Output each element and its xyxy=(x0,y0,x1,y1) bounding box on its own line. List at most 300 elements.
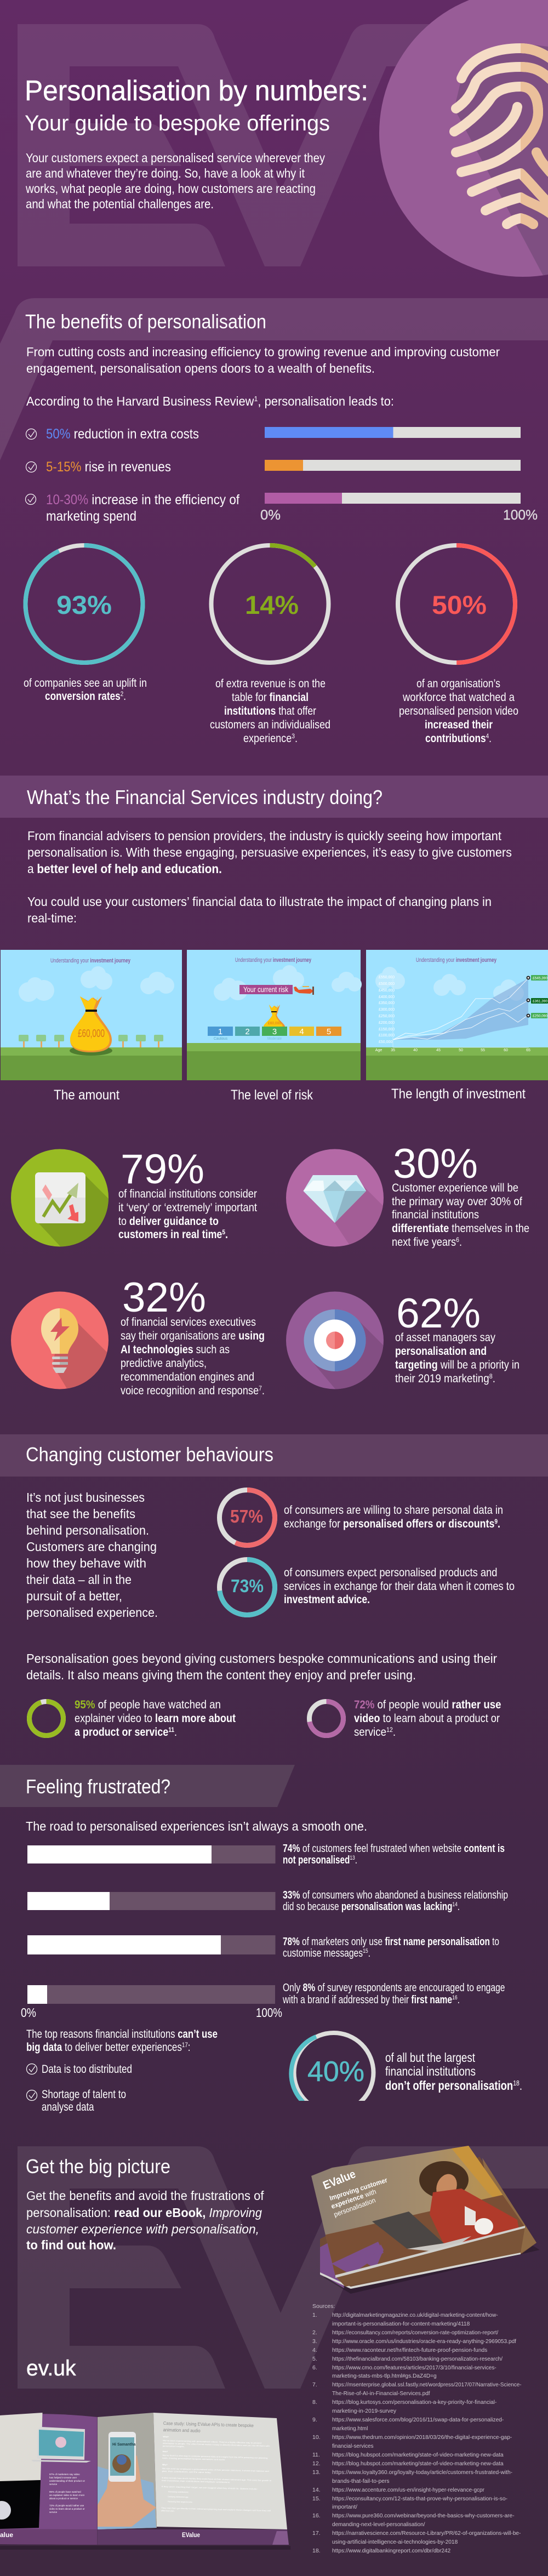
stat: 30%: . xyxy=(459,1236,462,1249)
ebook cover mock-up: Improving customer xyxy=(329,2176,389,2202)
bar labels: . xyxy=(458,1901,460,1913)
left page: alue xyxy=(0,2531,13,2539)
stat: 30%: differentiate themselves in the xyxy=(392,1222,529,1235)
intro text: From cutting costs and increasing efficiency to growing revenue and improving customer xyxy=(26,345,500,359)
stat ring: 73% xyxy=(219,1560,275,1615)
intro text: pursuit of a better, xyxy=(26,1589,122,1603)
text: 40%: . xyxy=(520,2078,522,2093)
text: 72%: 12 xyxy=(386,1726,393,1734)
text: 40% xyxy=(385,2050,522,2093)
stat: 32%: predictive analytics, xyxy=(121,1357,207,1370)
text: 40%: don’t offer personalisation xyxy=(385,2078,513,2093)
sources: https://www.salesforce.com/blog/2016/11/swap-data-for-personalized- xyxy=(332,2417,504,2423)
intro text: The road to personalised experiences isn’t always a smooth one. xyxy=(26,1819,367,1833)
top reasons: The top reasons financial institutions can’t use xyxy=(26,2028,218,2041)
stat: 79%: it ‘very’ or ‘extremely’ important xyxy=(118,1201,257,1214)
intro text: personalisation is. With these engaging, persuasive experiences, it’s easy to give customers xyxy=(27,845,512,859)
top reasons xyxy=(26,2028,218,2113)
illustration captions xyxy=(54,1086,526,1103)
sources: https://thefinancialbrand.com/58103/banking-personalization-research/ xyxy=(332,2356,503,2362)
icon: check xyxy=(26,429,36,440)
right page: Delaying retirement age xyxy=(168,2495,189,2498)
heading: Changing customer behaviours xyxy=(26,1443,273,1466)
gauge: 40% xyxy=(291,2033,374,2112)
illustration: the amount: £60,000 xyxy=(78,1028,105,1040)
illustration: the length of investment xyxy=(366,950,548,1080)
text: 95%: explainer video to learn more about xyxy=(75,1712,236,1725)
caption: 14%: institutions that offer xyxy=(224,705,316,717)
ebook cover mock-up: EValue xyxy=(321,2168,357,2192)
benefit 2: 5-15% rise in revenues xyxy=(46,459,171,475)
illustration: the length of investment: 35 xyxy=(391,1048,395,1052)
text: 57%: exchange for personalised offers or discounts xyxy=(284,1518,522,1530)
call to action text: customer experience with personalisation, xyxy=(26,2222,259,2236)
caption: 14%: of extra revenue is on the xyxy=(215,677,326,690)
illustration: the level of risk: Cautious xyxy=(214,1037,227,1041)
panel: get the big picture xyxy=(0,2143,548,2554)
text: 95%: a product or service xyxy=(75,1726,168,1739)
stat: 30%: Customer experience will be xyxy=(392,1182,518,1194)
benefit 1: 50% reduction in extra costs xyxy=(46,426,199,442)
left page: video to learn about a product or xyxy=(49,2507,85,2510)
stat: 62%: 62% xyxy=(396,1290,481,1337)
panel: feeling frustrated xyxy=(0,1765,522,2113)
illustration: the length of investment: £545,390 xyxy=(533,977,547,980)
stat: 32%: voice recognition and response xyxy=(121,1384,280,1397)
sources: The-Rise-of-AI-in-Financial-Services.pdf xyxy=(332,2390,430,2397)
stat: 30%: the primary way over 30% of xyxy=(392,1195,522,1208)
illustration: the length of investment: Age xyxy=(375,1048,382,1052)
bar labels: 15 xyxy=(363,1948,368,1954)
stat ring: 93% xyxy=(25,545,142,663)
stat ring: 14% xyxy=(212,545,329,663)
intro text: a better level of help and education. xyxy=(27,862,222,876)
illustration: the level of risk: Your current risk xyxy=(243,985,289,994)
illustration: the level of risk: 1 xyxy=(218,1027,222,1036)
illustration: the level of risk: 5 xyxy=(327,1027,331,1036)
illustration: the level of risk xyxy=(187,950,362,1080)
caption: 93%: conversion rates xyxy=(45,690,121,703)
sources: demanding-next-level-personalisation/ xyxy=(332,2521,425,2528)
right page: their investment, their contributions and employer contributions. xyxy=(162,2480,230,2483)
sources: 2. xyxy=(312,2329,317,2336)
stat: 62% xyxy=(286,1290,520,1398)
top reasons: Shortage of talent to xyxy=(42,2088,126,2101)
caption: 14%: table for financial xyxy=(232,691,309,704)
illustration: the length of investment: £361,390 xyxy=(533,1000,547,1003)
intro text xyxy=(27,829,512,925)
website address: ev.uk xyxy=(26,2356,77,2380)
right page: We’ve been experimenting with personalised videos. They’re a highly effective way to present xyxy=(163,2440,261,2444)
stat: 79%: of financial institutions consider xyxy=(118,1188,257,1200)
left page xyxy=(0,2413,98,2545)
stat: 30% xyxy=(286,1149,529,1249)
illustration: the amount: Understanding your investment journey xyxy=(50,958,131,964)
right page: tools, creating personalised bespoke animations and audio. xyxy=(162,2457,225,2461)
text: 73%: services in exchange for their data when it comes to xyxy=(284,1580,515,1593)
bar labels xyxy=(282,1843,508,2006)
illustration captions: The amount xyxy=(54,1087,119,1103)
left page: 72% of people would rather use xyxy=(49,2504,84,2507)
text: 57%: 9 xyxy=(494,1518,498,1525)
stat: 62%: . xyxy=(493,1372,495,1385)
intro text: works, what people are doing, how customers are reacting xyxy=(25,181,316,196)
call to action text: to find out how. xyxy=(26,2238,116,2252)
caption: 14% xyxy=(210,677,330,745)
caption: 93%: of companies see an uplift in xyxy=(24,677,147,689)
ebook cover mock-up: experience with xyxy=(330,2188,377,2210)
EV logo watermark xyxy=(18,2146,548,2389)
text: 72%: service xyxy=(354,1726,391,1739)
gauge: 40%: 40% xyxy=(307,2056,364,2088)
text: 40%: financial institutions xyxy=(385,2064,476,2078)
caption: 50%: contributions xyxy=(425,732,486,745)
sources: 14. xyxy=(312,2487,321,2493)
caption: 50% xyxy=(399,677,518,745)
section banner xyxy=(0,776,548,818)
sources: 3. xyxy=(312,2338,317,2345)
sources: marketing.html xyxy=(332,2425,368,2432)
right page: If they aren’t reaching their target, we can suggest what they should do. Options include: xyxy=(162,2486,258,2490)
panel: changing customer behaviours xyxy=(0,1434,548,1739)
call to action text: Get the benefits and avoid the frustrations of xyxy=(26,2189,264,2203)
illustration: the level of risk: Understanding your investment journey xyxy=(235,957,312,964)
sources: 4. xyxy=(312,2347,317,2353)
intro text: According to the Harvard Business Review xyxy=(26,394,265,408)
caption: 50%: 4 xyxy=(486,732,489,740)
illustration: the amount xyxy=(1,950,182,1080)
illustration: the length of investment: £100,000 xyxy=(379,1034,395,1038)
text: 72%: 72% of people would rather use xyxy=(354,1699,501,1711)
sources: 8. xyxy=(312,2399,317,2406)
illustration: the level of risk: 4 xyxy=(299,1027,304,1036)
bar labels: with a brand if addressed by their first name xyxy=(283,1994,464,2006)
right page: information to people. The video format makes it easy to absorb information and you can fill them with xyxy=(163,2442,270,2447)
sources: 7. xyxy=(312,2381,317,2388)
bar labels: 78% of marketers only use first name personalisation to xyxy=(283,1936,499,1948)
sources: https://econsultancy.com/12-stats-that-prove-why-personalisation-is-so- xyxy=(332,2495,507,2502)
body text: details. It also means giving them the content they enjoy and prefer using. xyxy=(26,1668,416,1682)
stat: 32%: recommendation engines and xyxy=(121,1371,254,1383)
bar labels: did so because personalisation was lacking xyxy=(283,1901,487,1913)
ebook open spread mock-up xyxy=(0,2413,290,2550)
call to action text: personalisation: read our eBook, Improving xyxy=(26,2205,262,2220)
text: 95%: 95% of people have watched an xyxy=(75,1699,221,1711)
intro text xyxy=(26,345,500,408)
intro text: behind personalisation. xyxy=(26,1523,149,1537)
stat: 32%: 7 xyxy=(259,1384,262,1392)
text: 40%: 18 xyxy=(513,2079,520,2087)
bar labels: 74% of customers feel frustrated when website content is xyxy=(283,1843,505,1855)
sources: https://blog.kurtosys.com/personalisation-a-key-priority-for-financial- xyxy=(332,2399,497,2406)
right page: plan, their contributions, and the value today. xyxy=(162,2470,212,2474)
stat: 79%: to deliver guidance to xyxy=(118,1215,219,1228)
stat ring: 57%: 57% xyxy=(230,1506,263,1526)
caption: 50%: . xyxy=(489,732,492,745)
caption: 50%: increased their xyxy=(425,719,493,731)
text: 95%: 11 xyxy=(168,1726,174,1734)
stat: 30%: financial institutions xyxy=(392,1209,479,1221)
intro text: personalised experience. xyxy=(26,1605,158,1620)
stat: 32%: 32% xyxy=(122,1274,206,1321)
sources: https://www.loyalty360.org/loyalty-today/article/customers-frustrated-with- xyxy=(332,2469,512,2476)
illustration: the level of risk: 2 xyxy=(245,1027,250,1036)
text: 73%: investment advice. xyxy=(284,1593,370,1606)
top reasons: Data is too distributed xyxy=(42,2063,132,2076)
bar chart: 100% xyxy=(503,508,538,523)
illustration: the length of investment: 45 xyxy=(436,1048,441,1052)
caption: 50%: of an organisation’s xyxy=(416,677,500,690)
illustration: the length of investment: £50,000 xyxy=(379,1040,392,1044)
text: 57%: . xyxy=(498,1518,500,1530)
stat: 79%: 5 xyxy=(222,1228,225,1236)
sources: https://www.pure360.com/webinar/beyond-the-basics-why-customers-are- xyxy=(332,2512,515,2519)
title: Personalisation by numbers: xyxy=(25,75,368,107)
illustration: the length of investment: £250,000 xyxy=(379,1015,395,1018)
intro text: It’s not just businesses xyxy=(26,1490,145,1504)
caption: 93%: . xyxy=(123,690,126,703)
ebook cover mock-up xyxy=(307,2143,540,2294)
intro text: Customers are changing xyxy=(26,1540,157,1554)
sources: https://www.raconteur.net/hr/fintech-future-proof-pension-funds xyxy=(332,2347,487,2353)
stat: 62%: 8 xyxy=(489,1372,493,1380)
sources: 16. xyxy=(312,2512,321,2519)
bar labels: . xyxy=(355,1854,357,1866)
illustration: the length of investment: 40 xyxy=(413,1048,418,1052)
right page: What? xyxy=(163,2436,169,2438)
icon: target xyxy=(286,1291,384,1389)
sources: 13. xyxy=(312,2469,321,2476)
stat: 62%: of asset managers say xyxy=(395,1331,495,1344)
intro text: You could use your customers’ financial data to illustrate the impact of changing plans in xyxy=(27,894,492,909)
right page xyxy=(98,2413,289,2545)
sources xyxy=(312,2303,522,2554)
right page: Hi Samantha xyxy=(112,2443,136,2447)
stat: 79% xyxy=(11,1149,257,1246)
sources: Sources: xyxy=(312,2303,335,2310)
sources: http://digitalmarketingmagazine.co.uk/digital-marketing-content/how- xyxy=(332,2312,498,2318)
sources: 15. xyxy=(312,2495,321,2502)
text: 57% xyxy=(284,1504,503,1530)
illustration: the length of investment: £550,000 xyxy=(379,976,395,979)
section banner xyxy=(0,298,548,460)
left page: understanding of their product or xyxy=(49,2480,85,2482)
illustration: the level of risk: 3 xyxy=(272,1027,277,1036)
panel: the benefits of personalisation xyxy=(0,298,548,745)
heading: Get the big picture xyxy=(26,2155,170,2178)
stat: 30%: next five years xyxy=(392,1236,466,1249)
right page: How? xyxy=(163,2450,168,2453)
stat: 32%: say their organisations are using xyxy=(121,1330,265,1342)
illustration: the length of investment: £400,000 xyxy=(379,995,395,999)
illustration: the length of investment: 55 xyxy=(481,1048,485,1052)
left page: has helped increase user xyxy=(49,2476,77,2479)
illustration: the length of investment: £450,000 xyxy=(379,989,395,993)
stat: 79%: customers in real time xyxy=(118,1228,241,1241)
right page: animation and audio xyxy=(163,2427,201,2433)
stat: 32% xyxy=(11,1274,265,1398)
bar chart xyxy=(260,427,538,523)
intro text xyxy=(25,151,325,211)
sources: marketing-stats-mbs-tlp.html#gs.DaZ4D=g xyxy=(332,2373,437,2379)
bar chart xyxy=(21,1845,282,2020)
stat: 79%: . xyxy=(225,1228,228,1241)
stat: 32%: AI technologies such as xyxy=(121,1343,230,1356)
section banner xyxy=(0,1434,548,1477)
text: 72%: . xyxy=(393,1726,396,1739)
icon: diamond xyxy=(286,1149,384,1246)
right page: It also reveals how much money they could have at their chosen retirement age. This uses the growth in xyxy=(162,2477,271,2482)
sources: https://blog.hubspot.com/marketing/state-of-video-marketing-new-data xyxy=(332,2460,504,2467)
caption: 50%: personalised pension video xyxy=(399,705,518,717)
bar labels: . xyxy=(458,1994,460,2006)
caption: 50%: workforce that watched a xyxy=(402,691,515,704)
panel: financial services industry xyxy=(0,776,548,1398)
bar labels: 13 xyxy=(350,1855,355,1861)
sources: 5. xyxy=(312,2356,317,2362)
benefit 3: marketing spend xyxy=(46,509,136,524)
right page: personalised insights. xyxy=(163,2445,185,2448)
bar labels: 14 xyxy=(452,1901,458,1908)
stat ring: 72% xyxy=(309,1701,343,1735)
left page: an explainer video to learn more xyxy=(49,2494,85,2497)
sources: https://www.thedrum.com/opinion/2018/03/26/the-digital-experience-gap- xyxy=(332,2434,512,2441)
right page: affect their plan. xyxy=(161,2510,175,2512)
top reasons: 17 xyxy=(182,2041,188,2049)
sources: important/ xyxy=(332,2504,357,2510)
stat: 30%: 6 xyxy=(456,1236,459,1244)
stat: 62%: personalisation and xyxy=(395,1345,487,1358)
stat ring: 14%: 14% xyxy=(245,590,299,619)
left page: about a product or service xyxy=(49,2497,78,2500)
sources: 17. xyxy=(312,2530,321,2537)
caption: 93%: 2 xyxy=(121,690,123,698)
text: 72%: video to learn about a product or xyxy=(354,1712,500,1725)
sources: https://blog.hubspot.com/marketing/state-of-video-marketing-new-data xyxy=(332,2452,504,2458)
intro text: their data – all in the xyxy=(26,1572,132,1587)
illustration: the length of investment: £250,090 xyxy=(533,1014,547,1018)
intro text: engagement, personalisation opens doors to a wealth of benefits. xyxy=(26,361,375,375)
top reasons: analyse data xyxy=(42,2101,94,2113)
sources: 18. xyxy=(312,2547,321,2554)
benefit 3 xyxy=(25,492,239,524)
sources: https://econsultancy.com/reports/conversion-rate-optimization-report/ xyxy=(332,2329,498,2336)
sources: 10. xyxy=(312,2434,321,2441)
sources: brands-that-fail-to-pers xyxy=(332,2478,390,2484)
right page: We’ve found a new way to combine personal data and insight from the APIs powering our planning xyxy=(162,2454,267,2459)
intro text: 1 xyxy=(254,395,258,403)
right page: Reducing their target income xyxy=(168,2500,192,2503)
sources: https://www.accenture.com/us-en/insight-hyper-relevance-gcpr xyxy=(332,2487,484,2493)
icon: check xyxy=(25,494,36,504)
top reasons: big data to deliver better experiences xyxy=(26,2041,210,2054)
text: 73% xyxy=(284,1566,515,1606)
caption: 93% xyxy=(24,677,147,703)
right page: Increasing contributions xyxy=(168,2490,189,2493)
illustration: the length of investment: £500,000 xyxy=(379,982,395,986)
left page: service xyxy=(49,2511,58,2514)
stat ring: 95% xyxy=(30,1701,64,1735)
bar chart: 100% xyxy=(256,2005,282,2020)
section banner xyxy=(0,1765,295,1807)
intro text: real-time: xyxy=(27,911,77,925)
body text xyxy=(26,1651,497,1682)
left page: 95% of people have watched xyxy=(49,2490,81,2493)
sources: 12. xyxy=(312,2460,321,2467)
right page: They can then go directly to their retirement planning tool and explore these changes and how they will xyxy=(161,2507,271,2512)
heading: What’s the Financial Services industry doing? xyxy=(27,786,383,808)
heading: Feeling frustrated? xyxy=(26,1775,170,1798)
bar labels: 16 xyxy=(452,1994,458,2001)
intro text: From financial advisers to pension providers, the industry is quickly seeing how important xyxy=(27,829,502,843)
intro text: Your customers expect a personalised service wherever they xyxy=(26,151,325,165)
sources: using-artificial-intelligence-ai-technologies-by-2018 xyxy=(332,2539,458,2545)
illustration captions: The level of risk xyxy=(231,1087,313,1103)
text: 57%: of consumers are willing to share personal data in xyxy=(284,1504,503,1517)
heading: The benefits of personalisation xyxy=(25,310,266,333)
illustration: the length of investment: £150,000 xyxy=(379,1028,395,1031)
sources: 9. xyxy=(312,2417,317,2423)
illustration: the length of investment: £350,000 xyxy=(379,1001,395,1005)
caption: 14%: experience xyxy=(243,732,300,745)
sources: https://www.cmo.com/features/articles/2017/3/10/financial-services- xyxy=(332,2364,496,2371)
ebook cover mock-up: personalisation xyxy=(333,2196,376,2219)
bar labels: customise messages xyxy=(283,1947,385,1959)
icon: chart card xyxy=(11,1149,109,1246)
subtitle: Your guide to bespoke offerings xyxy=(25,111,330,135)
sources: https://www.digitalbankingreport.com/dbr/dbr242 xyxy=(332,2547,450,2554)
icon: check xyxy=(26,461,36,472)
stat ring: 50% xyxy=(398,545,515,663)
intro text xyxy=(26,1490,158,1620)
stat ring: 57% xyxy=(219,1490,275,1546)
right page: Case study: Using EValue APIs to create bespoke xyxy=(163,2420,254,2428)
illustration: the level of risk: Moderate xyxy=(267,1037,282,1041)
illustration: the length of investment: £200,000 xyxy=(379,1021,395,1025)
text: 73%: of consumers expect personalised products and xyxy=(284,1566,498,1579)
illustration captions: The length of investment xyxy=(391,1086,526,1102)
intro text: that see the benefits xyxy=(26,1507,135,1521)
icon: check xyxy=(26,2064,37,2074)
top reasons: : xyxy=(188,2041,191,2054)
intro text: are and whatever they’re doing. So, have a look at why it xyxy=(26,166,305,180)
sources: https://narrativescience.com/Resource-Library/PR/62-of-organizations-will-be- xyxy=(332,2530,521,2537)
illustration: the length of investment: Understanding your investment journey xyxy=(416,957,497,964)
sources: marketing-in-2019-survey xyxy=(332,2408,397,2414)
stat: 32%: . xyxy=(262,1384,265,1397)
bar labels: not personalised xyxy=(283,1854,350,1866)
sources: 1. xyxy=(312,2312,317,2318)
illustration: the length of investment: 50 xyxy=(459,1048,463,1052)
stat: 62%: their 2019 marketing xyxy=(395,1372,500,1385)
stat ring: 50%: 50% xyxy=(432,590,487,619)
caption: 14%: 3 xyxy=(292,732,295,740)
caption: 14%: . xyxy=(295,732,298,745)
text: 95% xyxy=(75,1699,236,1739)
stat: 79%: 79% xyxy=(121,1146,204,1193)
sources: important-is-personalisation-for-content-marketing/4118 xyxy=(332,2321,470,2327)
header panel xyxy=(18,0,548,280)
stat: 62%: targeting will be a priority in xyxy=(395,1359,520,1371)
stat ring: 73%: 73% xyxy=(231,1576,264,1596)
call to action text xyxy=(26,2189,264,2252)
intro text: , personalisation leads to: xyxy=(258,394,394,408)
icon: light bulb xyxy=(11,1291,109,1389)
text: 40%: of all but the largest xyxy=(385,2050,475,2065)
sources: 6. xyxy=(312,2364,317,2371)
intro text: how they behave with xyxy=(26,1556,146,1570)
text: 72% xyxy=(354,1699,501,1739)
